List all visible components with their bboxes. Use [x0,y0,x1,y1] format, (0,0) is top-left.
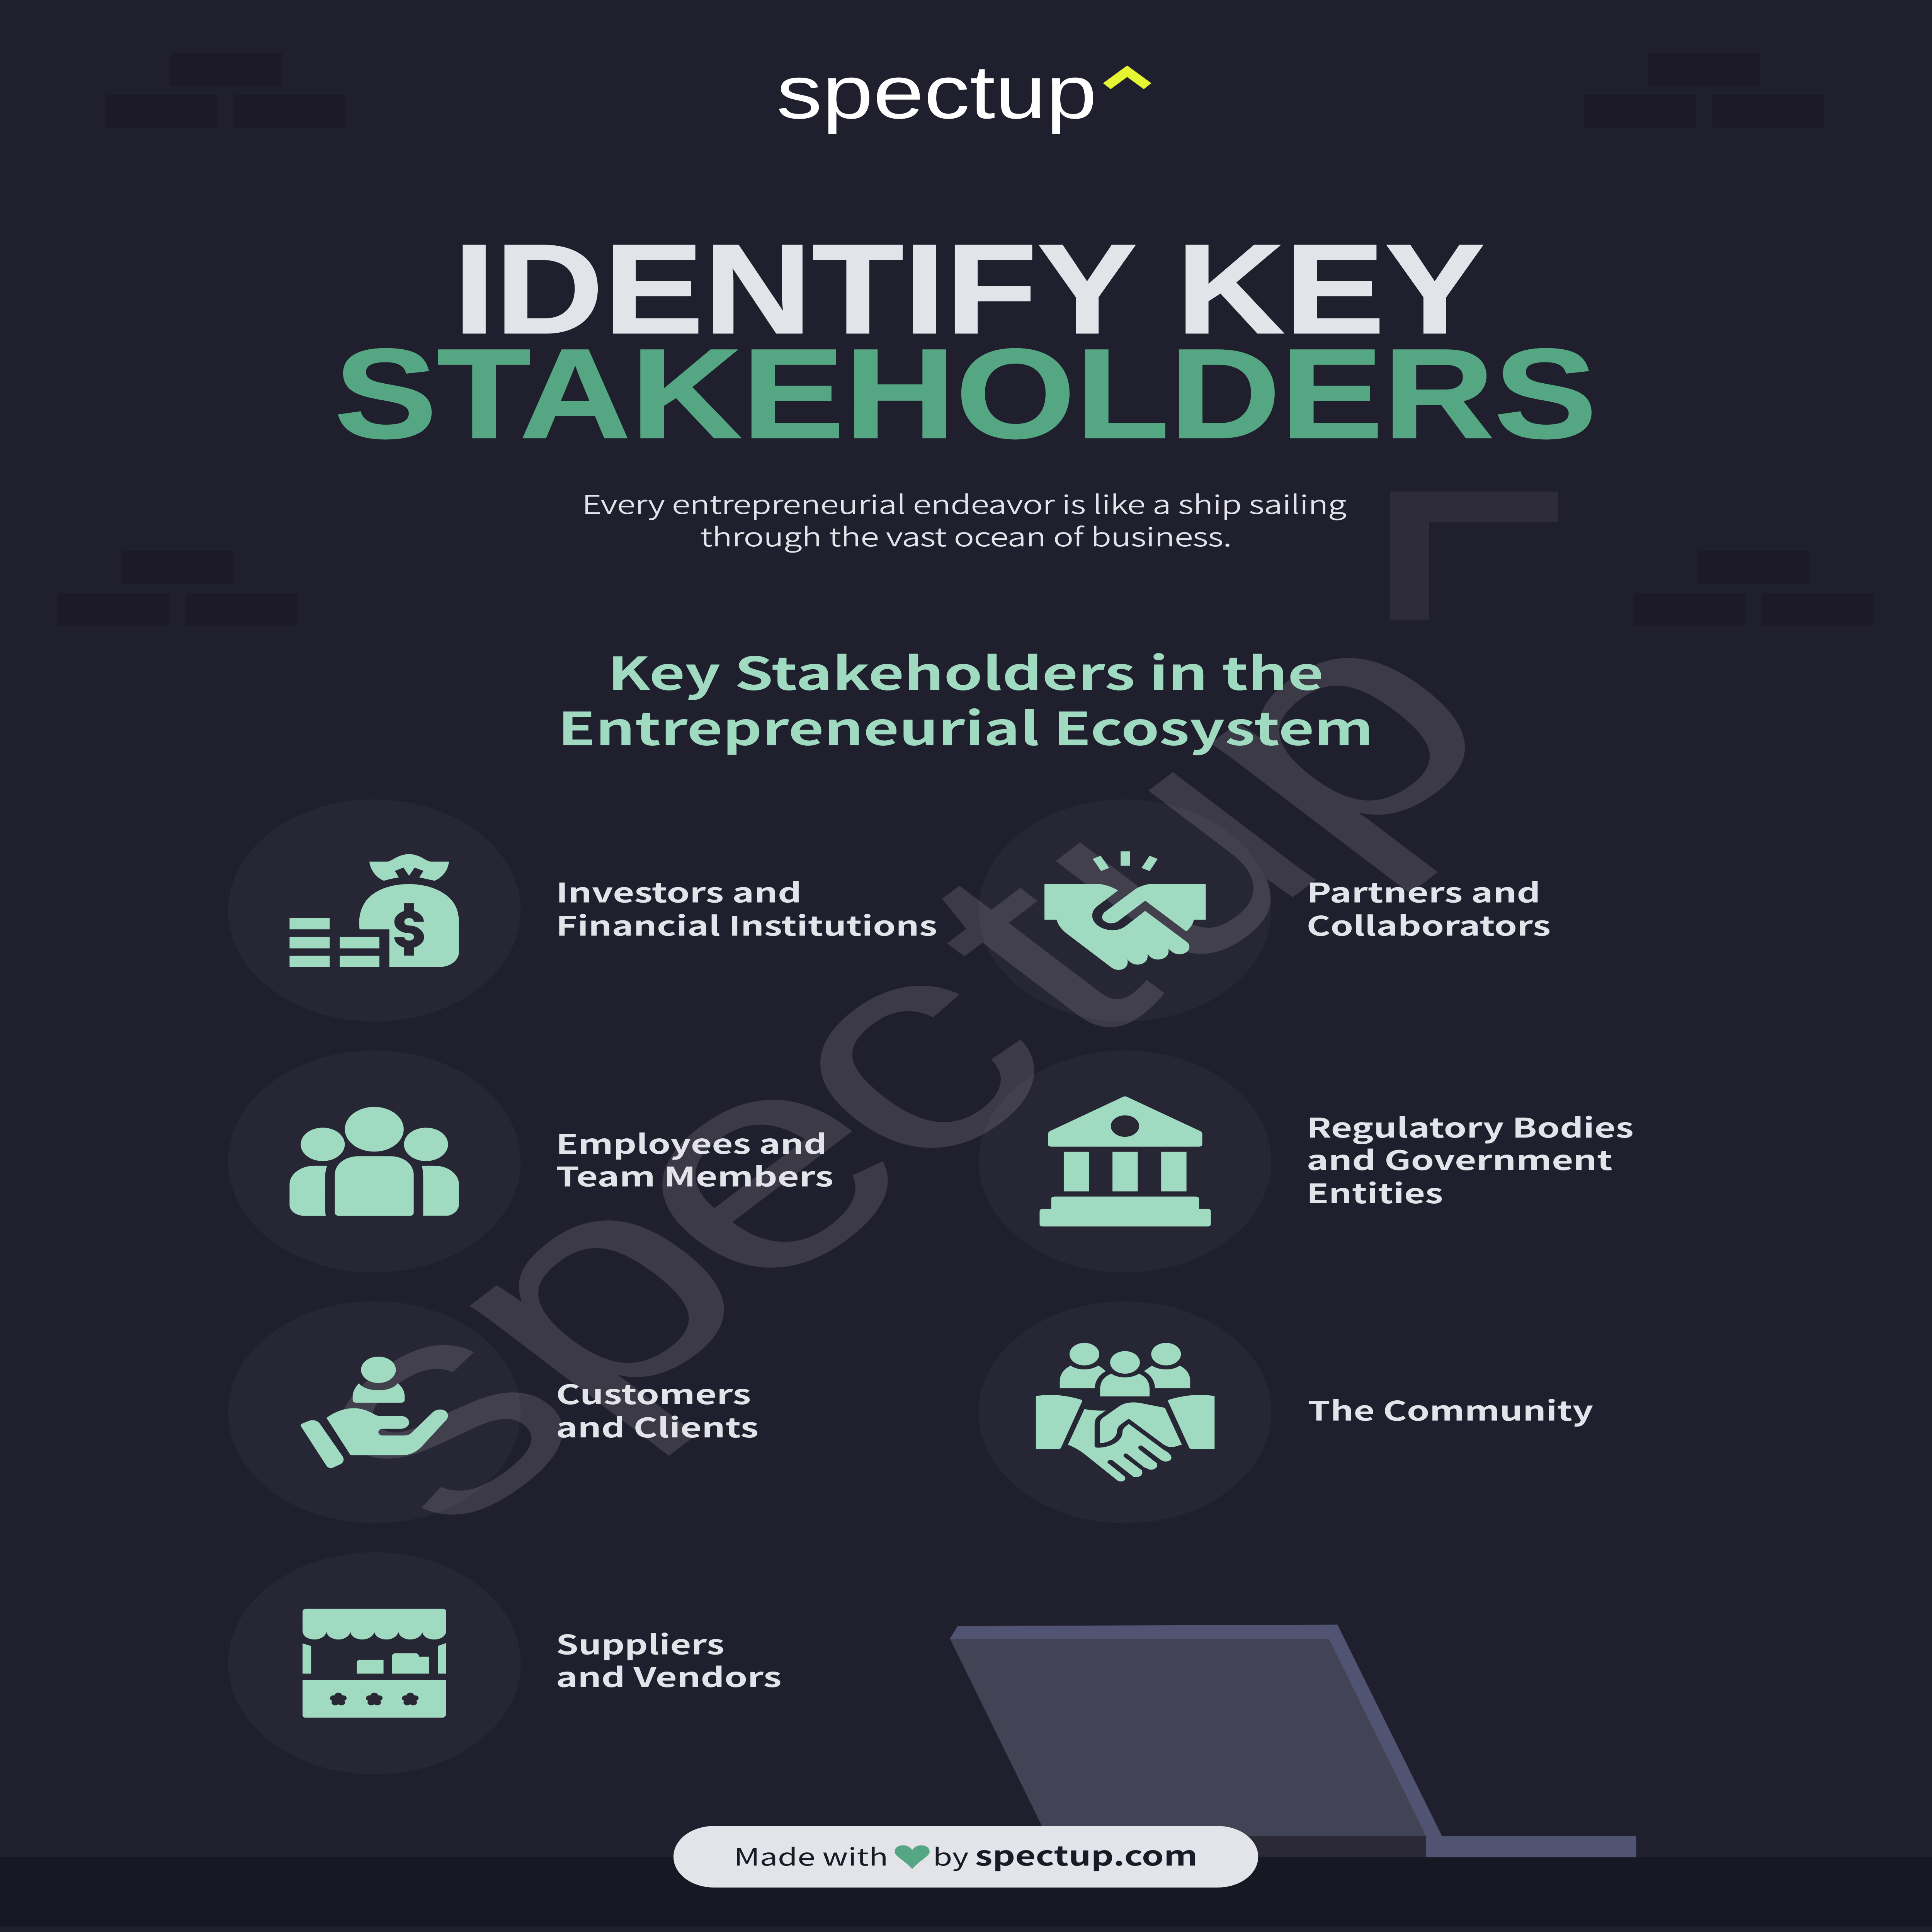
circle [228,1051,520,1272]
watermark: spectup rotated: p [1089,548,1568,912]
watermark caret [1390,492,1558,620]
label [556,1374,759,1446]
bricks: middle left [58,551,298,626]
footer pill [673,1826,1258,1888]
panel: investors [228,799,937,1022]
label: Partners and [1306,872,1541,910]
circle [979,799,1271,1022]
label: Team Members [556,1156,833,1194]
circle [979,1051,1271,1272]
circle [979,1301,1271,1523]
footer pill: by [933,1838,969,1872]
icon: heart [895,1845,930,1869]
bricks: top right [1584,53,1824,128]
laptop illustration [950,1625,1636,1857]
circle [228,1552,520,1774]
section heading: Entrepreneurial Ecosystem [558,693,1374,758]
icon: community handshake [1036,1343,1214,1481]
title: IDENTIFY KEY [453,218,1485,360]
panel: community [979,1301,1593,1523]
circle [228,1301,520,1523]
bricks: middle right [1634,551,1874,626]
logo: spectup [776,50,1097,134]
panel: suppliers [228,1552,782,1774]
watermark: spectup rotated: s [203,1240,655,1583]
panel: regulators [979,1051,1634,1272]
footer pill: Made with [734,1838,888,1872]
label: Collaborators [1306,905,1551,944]
subtitle [582,485,1346,554]
label [556,872,937,944]
icon: hand holding person [301,1357,448,1468]
label [556,1624,782,1695]
label [556,1123,833,1194]
label: Suppliers [556,1624,724,1662]
watermark: spectup rotated: t [841,806,1226,1099]
icon: government building [1039,1096,1211,1226]
label: The Community [1308,1390,1593,1429]
watermark: spectup rotated: c [671,880,1129,1228]
section heading: Key Stakeholders in the [608,638,1324,703]
label: and Vendors [556,1656,782,1695]
icon: money bag and coins [289,854,459,967]
label: Regulatory Bodies [1306,1107,1634,1145]
icon: handshake [1044,851,1206,970]
panel: customers [228,1301,759,1523]
title: STAKEHOLDERS [334,322,1597,465]
label: and Clients [556,1406,759,1446]
label: Entities [1306,1172,1443,1211]
watermark: spectup rotated [202,548,1568,1584]
label: Customers [556,1374,751,1412]
subtitle: Every entrepreneurial endeavor is like a ship sailing [582,485,1346,521]
panel: employees [228,1051,833,1272]
label: Financial Institutions [556,905,937,944]
watermark: spectup rotated: e [512,986,990,1349]
label [1306,872,1551,944]
label [1306,1107,1634,1211]
title [334,218,1597,465]
watermark: spectup rotated: u [936,680,1392,1026]
circle [228,799,520,1022]
floor band [0,1857,1932,1927]
label: and Government [1306,1139,1612,1178]
footer pill: spectup.com [975,1835,1198,1873]
subtitle: through the vast ocean of business. [701,517,1231,554]
panel: partners [979,799,1551,1022]
bricks: top left [106,53,346,128]
section heading [558,638,1374,758]
watermark: spectup rotated: p [348,1110,827,1475]
icon: market stall [303,1609,446,1718]
icon: team [289,1107,459,1216]
label: Investors and [556,872,801,910]
label: Employees and [556,1123,827,1162]
